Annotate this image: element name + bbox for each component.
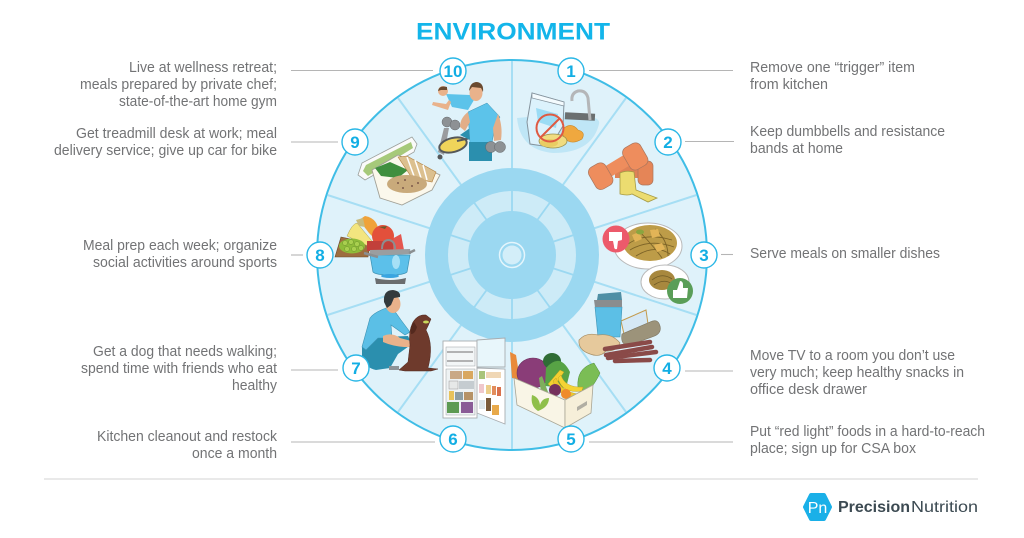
badge 10 [440, 58, 466, 84]
logo: Precision Nutrition [805, 495, 978, 519]
badge 10: 10 [444, 62, 462, 81]
badge 7: 7 [351, 359, 361, 378]
text: step 6: Kitchen cleanout and restock [97, 428, 277, 445]
text: step 2: bands at home [750, 140, 843, 157]
text: step 8 [83, 237, 277, 271]
wheel hub light ring [448, 191, 576, 319]
text: step 10: Live at wellness retreat; [129, 59, 277, 76]
icon: Pn hexagon [805, 495, 830, 519]
wheel diagram [317, 60, 707, 450]
illustration: chip bag in sink [517, 91, 599, 153]
badge 2 [655, 129, 681, 155]
text: step 4: office desk drawer [750, 381, 867, 398]
text: step 9: Get treadmill desk at work; meal [76, 125, 277, 142]
text: step 2: Keep dumbbells and resistance [750, 123, 945, 140]
text: step 8: Meal prep each week; organize [83, 237, 277, 254]
text: step 1 [750, 59, 915, 93]
text: step 1: from kitchen [750, 76, 828, 93]
illustration: open fridge [443, 338, 505, 424]
text: step 7: healthy [232, 377, 277, 394]
icon: thumbs up [667, 278, 693, 304]
text: step 10: meals prepared by private chef; [80, 76, 277, 93]
badge 3 [691, 242, 717, 268]
badge 3: 3 [699, 246, 709, 265]
illustration: CSA produce box [510, 352, 600, 428]
text: step 6 [97, 428, 277, 462]
illustration: home gym with two men [432, 82, 506, 161]
text: step 10: state-of-the-art home gym [119, 93, 277, 110]
badge 7 [343, 355, 369, 381]
wheel hub dark ring [425, 168, 599, 342]
text: step 6: once a month [192, 445, 277, 462]
badge 5: 5 [566, 430, 576, 449]
wheel hub centre [468, 211, 556, 299]
text: step 4: very much; keep healthy snacks in [750, 364, 964, 381]
title: ENVIRONMENT [416, 18, 610, 46]
badge 4 [654, 355, 680, 381]
text: step 1: Remove one “trigger” item [750, 59, 915, 76]
wheel outer disc [317, 60, 707, 450]
text: step 4: Move TV to a room you don’t use [750, 347, 955, 364]
illustration: shaker bottle and snacks [579, 292, 660, 361]
illustration: man petting dog [362, 290, 438, 371]
number badges [307, 58, 717, 452]
illustration: dumbbells and resistance band [586, 141, 657, 202]
wheel hub bullseye [500, 242, 524, 268]
illustration: large and small plates [602, 223, 693, 304]
text: step 9 [54, 125, 277, 159]
text: step 5 [750, 423, 985, 457]
badge 4: 4 [662, 359, 672, 378]
leader lines [291, 70, 734, 442]
text: step 7: Get a dog that needs walking; [93, 343, 277, 360]
badge 1: 1 [566, 62, 576, 81]
badge 9: 9 [350, 133, 360, 152]
badge 6: 6 [448, 430, 458, 449]
badge 2: 2 [663, 133, 673, 152]
logo: Precision Nutrition: Nutrition [911, 499, 978, 516]
illustration: meal delivery container [358, 137, 440, 205]
badge 6 [440, 426, 466, 452]
badge 8: 8 [315, 246, 325, 265]
badge 8 [307, 242, 333, 268]
badge 1 [558, 58, 584, 84]
text: step 7: spend time with friends who eat [81, 360, 278, 377]
badge 5 [558, 426, 584, 452]
text: step 9: delivery service; give up car for bike [54, 142, 277, 159]
text: step 8: social activities around sports [93, 254, 277, 271]
text: step 5: place; sign up for CSA box [750, 440, 916, 457]
icon: thumbs down [602, 226, 630, 252]
text: step 7 [81, 343, 278, 394]
illustration: cooking pot with vegetables [335, 216, 415, 284]
badge 9 [342, 129, 368, 155]
text: step 2 [750, 123, 945, 157]
icon: Pn hexagon: Pn [808, 500, 827, 517]
text: step 3: Serve meals on smaller dishes [750, 245, 940, 262]
text: step 4 [750, 347, 964, 398]
logo: Precision Nutrition: Precision [838, 499, 910, 516]
text: step 10 [80, 59, 277, 110]
text: step 5: Put “red light” foods in a hard-to-reach [750, 423, 985, 440]
